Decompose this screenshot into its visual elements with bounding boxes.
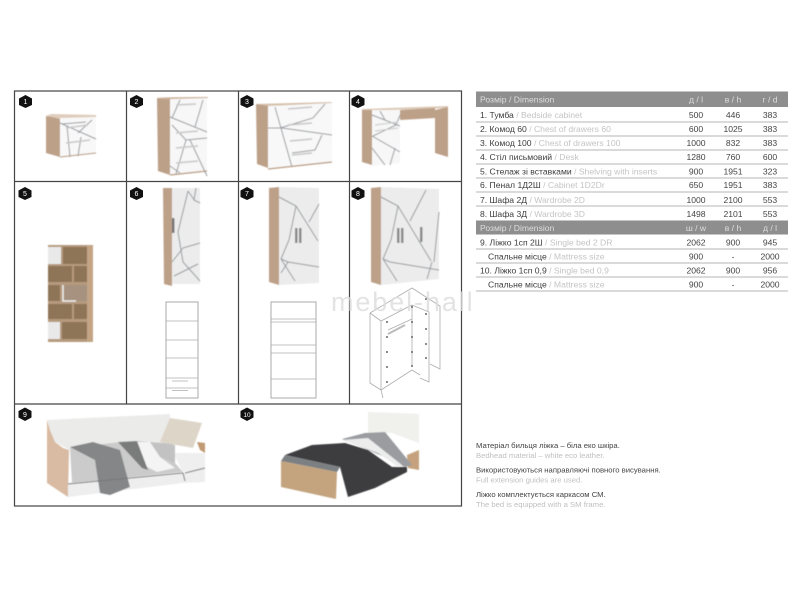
row 7 (480, 195, 777, 205)
badge 8 (352, 187, 364, 200)
badge 3 (240, 95, 254, 108)
row 9 mattress: Спальне місце / Mattress size (488, 252, 605, 262)
notes: Bedhead material – white eco leather. (476, 451, 605, 460)
row 2: 600 (689, 124, 703, 134)
badge 9 (18, 408, 32, 421)
table header 2: в / h (725, 223, 741, 233)
badge 6: 6 (135, 191, 139, 198)
drawing: wardrobe 3D open (370, 288, 440, 398)
row 8: 1498 (686, 209, 706, 219)
table header 2: Розмір / Dimension (480, 223, 555, 233)
row 2: 383 (763, 124, 777, 134)
table: dimensions (476, 92, 788, 291)
row 2: 1025 (723, 124, 743, 134)
row 10 mattress (488, 280, 780, 290)
row 9 mattress: 2000 (760, 252, 780, 262)
item 10: single bed 0.9 (281, 412, 419, 499)
row 2: 2. Комод 60 / Chest of drawers 60 (480, 124, 611, 134)
table header 1: д / l (689, 94, 703, 104)
row 9 mattress: - (732, 252, 735, 262)
row 8 (480, 209, 777, 219)
row 4: 600 (763, 152, 777, 162)
row 6: 383 (763, 180, 777, 190)
row 5: 1951 (723, 166, 743, 176)
row 10 mattress: - (732, 280, 735, 290)
drawing: cabinet 1D2Dr (166, 302, 198, 398)
badge 6 (130, 187, 143, 200)
row 8: 553 (763, 209, 777, 219)
badge 9: 9 (23, 412, 27, 419)
row 7: 2100 (723, 195, 743, 205)
row 4: 1280 (686, 152, 706, 162)
notes: Full extension guides are used. (476, 476, 582, 484)
badge 2 (130, 95, 143, 108)
table header 1: Розмір / Dimension (480, 94, 555, 104)
row 9 mattress: 900 (689, 252, 703, 262)
row 5 (480, 166, 777, 176)
row 3: 1000 (686, 138, 706, 148)
row 7: 553 (763, 195, 777, 205)
row 10 mattress: 2000 (760, 280, 780, 290)
row 10: 956 (763, 266, 777, 276)
table header 2 (476, 220, 788, 234)
row 9 (480, 238, 777, 248)
row 7: 7. Шафа 2Д / Wardrobe 2D (480, 195, 585, 205)
row 1: 383 (763, 110, 777, 120)
row 4: 760 (726, 152, 740, 162)
row 9 mattress (488, 252, 780, 262)
row 1: 446 (726, 110, 740, 120)
badge 3: 3 (245, 99, 249, 106)
row 2 (480, 124, 777, 134)
row 5: 900 (689, 166, 703, 176)
badge 7 (240, 187, 254, 200)
item 9: single bed 2 DR (47, 414, 205, 497)
notes: Матеріал бильця ліжка – біла еко шкіра. (476, 441, 620, 450)
table header 1: г / d (762, 94, 778, 104)
row 1: 1. Тумба / Bedside cabinet (480, 110, 583, 120)
row 6: 6. Пенал 1Д2Ш / Cabinet 1D2Dr (480, 180, 605, 190)
row 8: 2101 (723, 209, 743, 219)
item 1: bedside cabinet (46, 114, 96, 157)
item 8: wardrobe 3D (371, 187, 439, 285)
drawing: wardrobe 2D (271, 302, 316, 398)
table header 1: в / h (725, 94, 741, 104)
badge 1: 1 (24, 99, 28, 106)
row 10: 10. Ліжко 1сп 0,9 / Single bed 0,9 (480, 266, 609, 276)
row 3 (480, 138, 777, 148)
row 10 (480, 266, 777, 276)
badge 5 (18, 187, 32, 200)
row 10 mattress: Спальне місце / Mattress size (488, 280, 605, 290)
notes: The bed is equipped with a SM frame. (476, 500, 605, 509)
badge 1 (19, 95, 32, 108)
item 3: chest of drawers 100 (256, 102, 332, 169)
row 6: 650 (689, 180, 703, 190)
row 9: 945 (763, 238, 777, 248)
notes (476, 441, 661, 509)
badge 5: 5 (23, 191, 27, 198)
notes: Ліжко комплектується каркасом СМ. (476, 490, 606, 499)
item 7: wardrobe 2D (269, 187, 319, 285)
table header 2: ш / w (686, 223, 707, 233)
row 4: 4. Стіл письмовий / Desk (480, 152, 580, 162)
watermark: mebel-hall (331, 287, 475, 317)
badge 4: 4 (356, 99, 360, 106)
row 9: 9. Ліжко 1сп 2Ш / Single bed 2 DR (480, 238, 612, 248)
row 10 mattress: 900 (689, 280, 703, 290)
row 6: 1951 (723, 180, 743, 190)
badge 2: 2 (135, 99, 139, 106)
row 4 (480, 152, 777, 162)
row 5: 5. Стелаж зі вставками / Shelving with inserts (480, 166, 657, 176)
table header 2: д / l (763, 223, 777, 233)
badge 7: 7 (245, 191, 249, 198)
item 6: cabinet 1D2Dr (163, 188, 200, 286)
item 4: desk (362, 106, 448, 166)
notes: Використовуються направляючі повного висування. (476, 466, 661, 474)
row 3: 832 (726, 138, 740, 148)
row 6 (480, 180, 777, 190)
row 3: 3. Комод 100 / Chest of drawers 100 (480, 138, 621, 148)
panel: product grid (14, 91, 462, 506)
row lines (476, 122, 788, 291)
row 1: 500 (689, 110, 703, 120)
item 5: shelving with inserts (48, 245, 93, 342)
table header 1 (476, 92, 788, 107)
badge 8: 8 (356, 191, 360, 198)
badge 4 (352, 95, 364, 108)
row 1 (480, 110, 777, 120)
badge 10: 10 (243, 412, 251, 419)
row 3: 383 (763, 138, 777, 148)
row 5: 323 (763, 166, 777, 176)
row 9: 900 (726, 238, 740, 248)
row 7: 1000 (686, 195, 706, 205)
row 8: 8. Шафа 3Д / Wardrobe 3D (480, 209, 585, 219)
row 10: 2062 (686, 266, 706, 276)
item 2: chest of drawers 60 (157, 97, 208, 176)
row 10: 900 (726, 266, 740, 276)
badge 10 (240, 408, 254, 421)
row 9: 2062 (686, 238, 706, 248)
